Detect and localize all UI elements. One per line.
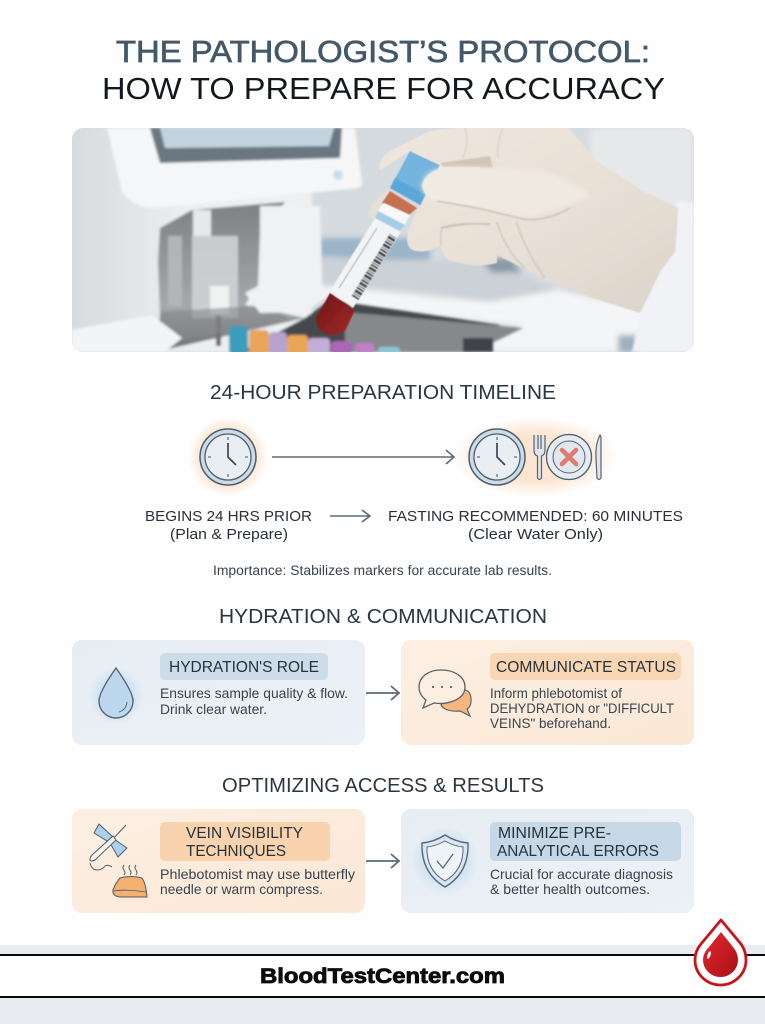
glove hand <box>380 126 678 313</box>
body text: Phlebotomist may use butterfly <box>160 866 355 882</box>
footer band <box>0 945 765 1024</box>
body text <box>490 866 673 897</box>
arrow: timeline <box>272 450 454 464</box>
photo: gloved hand holding blood tube <box>72 126 694 355</box>
timeline label: fasting: (Clear Water Only) <box>468 526 603 543</box>
pill heading: HYDRATION'S ROLE <box>169 659 319 676</box>
icon: clock and plate fasting <box>453 417 617 497</box>
icon: water drop <box>88 668 144 724</box>
body text: needle or warm compress. <box>160 881 323 897</box>
panel: minimize errors <box>401 809 694 913</box>
pill heading: TECHNIQUES <box>186 843 286 860</box>
body text: Inform phlebotomist of <box>490 685 622 701</box>
panel: hydration's role <box>72 640 365 745</box>
body text: Crucial for accurate diagnosis <box>490 866 673 882</box>
slot between index finger and thumb <box>440 156 493 168</box>
body text <box>490 685 674 731</box>
blood tube <box>316 151 440 335</box>
pill heading: ANALYTICAL ERRORS <box>497 843 659 860</box>
title: HOW TO PREPARE FOR ACCURACY <box>102 71 665 106</box>
arrow: vein to errors <box>366 854 399 868</box>
icon: clock begins <box>188 417 268 497</box>
analyzer body <box>72 128 312 352</box>
icon: chat bubbles <box>419 670 471 716</box>
thumb <box>422 167 590 218</box>
pill heading: COMMUNICATE STATUS <box>496 659 676 676</box>
pill heading <box>160 822 330 861</box>
pill heading: MINIMIZE PRE- <box>498 825 611 842</box>
knife <box>596 435 601 480</box>
sample tubes in tray <box>229 326 248 354</box>
icon: shield <box>411 827 479 895</box>
pill heading <box>160 653 328 680</box>
body text <box>160 866 355 897</box>
heading: hydration: HYDRATION & COMMUNICATION <box>219 605 547 628</box>
fork <box>534 435 545 480</box>
icon: butterfly needle and warm compress <box>90 824 147 897</box>
plate <box>546 434 592 480</box>
body text: Drink clear water. <box>160 701 267 717</box>
timeline label: begins: BEGINS 24 HRS PRIOR <box>145 508 312 525</box>
timeline label: fasting: FASTING RECOMMENDED: 60 MINUTES <box>388 508 683 525</box>
timeline label: begins: (Plan & Prepare) <box>170 526 288 543</box>
finger behind tube <box>369 189 392 218</box>
body text: Ensures sample quality & flow. <box>160 685 348 701</box>
importance note: Importance: Stabilizes markers for accurate lab results. <box>213 563 552 578</box>
timeline label: fasting <box>388 508 683 543</box>
heading: optimizing: OPTIMIZING ACCESS & RESULTS <box>222 774 544 797</box>
arrow: label <box>330 510 370 522</box>
body text: VEINS" beforehand. <box>490 715 611 731</box>
heading: 24-hour timeline: 24-HOUR PREPARATION TIMELINE <box>210 381 556 404</box>
arrow: hydration to communicate <box>366 686 399 700</box>
body text: & better health outcomes. <box>490 881 650 897</box>
pill heading: VEIN VISIBILITY <box>186 825 303 842</box>
timeline label: begins <box>145 508 312 543</box>
panel: communicate status <box>401 640 694 745</box>
title: THE PATHOLOGIST’S PROTOCOL: <box>116 34 650 69</box>
screen housing <box>107 128 362 208</box>
logo: blood drop <box>695 920 746 985</box>
panel: vein visibility <box>72 809 365 913</box>
footer url: BloodTestCenter.com <box>260 965 505 988</box>
pill heading <box>490 822 681 861</box>
body text: DEHYDRATION or "DIFFICULT <box>490 700 674 716</box>
title <box>102 34 665 106</box>
body text <box>160 685 348 717</box>
lab coat <box>632 201 694 352</box>
pill heading <box>490 653 681 680</box>
